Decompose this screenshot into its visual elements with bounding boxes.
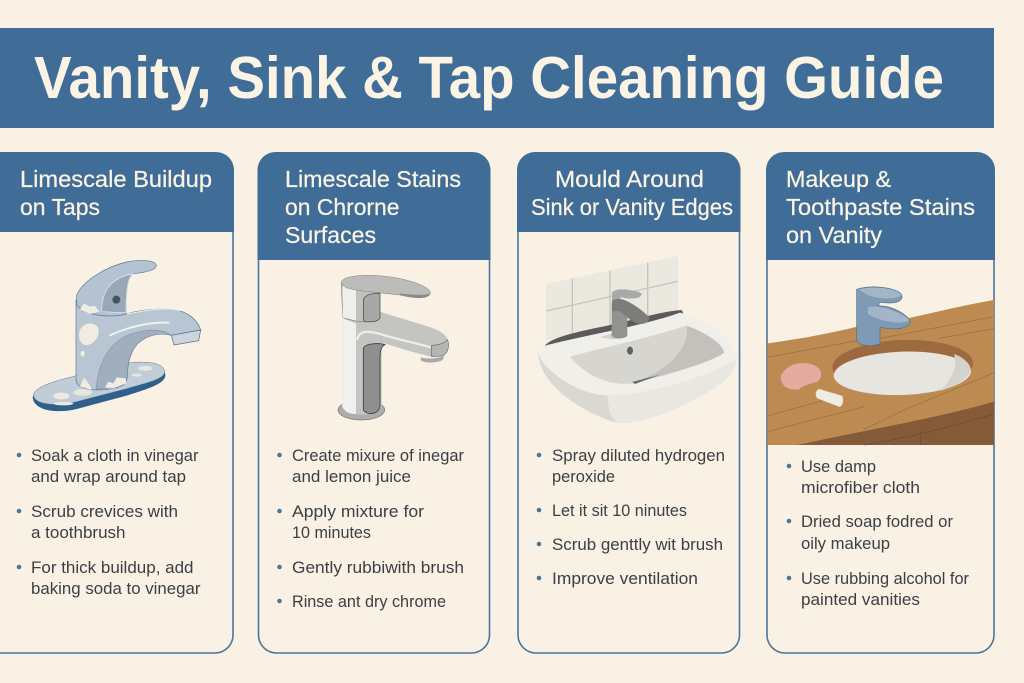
bullet list: Use rubbing alcohol for [801,570,969,588]
bullet list: and lemon juice [292,468,411,486]
bullet list [17,447,201,598]
panel heading: Limescale Stains [285,166,461,192]
panel heading [0,152,234,232]
icon: vanity countertop with stains [767,287,994,445]
panel: limescale stains on chrome surfaces [258,152,490,653]
panel heading: Makeup & [786,166,891,192]
bullet list: a toothbrush [31,524,126,542]
panel heading: Limescale Buildup [20,166,212,192]
icon: tap with limescale [33,260,201,411]
title: Vanity, Sink & Tap Cleaning Guide [34,45,944,111]
icon: wall-mounted sink with mould [538,256,737,423]
bullet list: painted vanities [801,591,920,609]
bullet list: For thick buildup, add [31,559,194,577]
icon: chrome tap [338,275,448,420]
panel heading [517,152,740,232]
bullet list: 10 minutes [292,524,371,542]
panel heading: Toothpaste Stains [786,194,975,220]
panel heading [258,152,490,260]
panel heading: on Vanity [786,222,882,248]
bullet list [787,458,969,609]
bullet list: Gently rubbiwith brush [292,559,464,577]
bullet list: Dried soap fodred or [801,513,954,531]
panel heading: on Chrorne [285,194,400,220]
bullet list: baking soda to vinegar [31,580,201,598]
bullet list: Apply mixture for [292,503,425,521]
bullet list: and wrap around tap [31,468,186,486]
bullet list: microfiber cloth [801,479,920,497]
bullet list: Improve ventilation [552,570,698,588]
panel heading: Surfaces [285,222,376,248]
bullet list: Use damp [801,458,876,476]
bullet list: Spray diluted hydrogen [552,447,725,465]
panel: limescale buildup on taps [0,152,234,653]
bullet list: Let it sit 10 ninutes [552,502,687,520]
panel heading [766,152,995,260]
panel: mould around sink or vanity edges [517,152,740,653]
panel heading: Mould Around [555,166,704,192]
bullet list: Rinse ant dry chrome [292,593,446,611]
bullet list: Scrub crevices with [31,503,178,521]
bullet list: Scrub genttly wit brush [552,536,723,554]
bullet list: peroxide [552,468,615,486]
panel heading: on Taps [20,194,100,220]
panel heading: Sink or Vanity Edges [531,194,733,220]
panel: makeup and toothpaste stains on vanity [766,152,995,653]
bullet list: Create mixure of inegar [292,447,464,465]
bullet list: Soak a cloth in vinegar [31,447,199,465]
bullet list: oily makeup [801,535,890,553]
bullet list [277,447,464,611]
title banner [0,28,994,128]
bullet list [537,447,725,588]
